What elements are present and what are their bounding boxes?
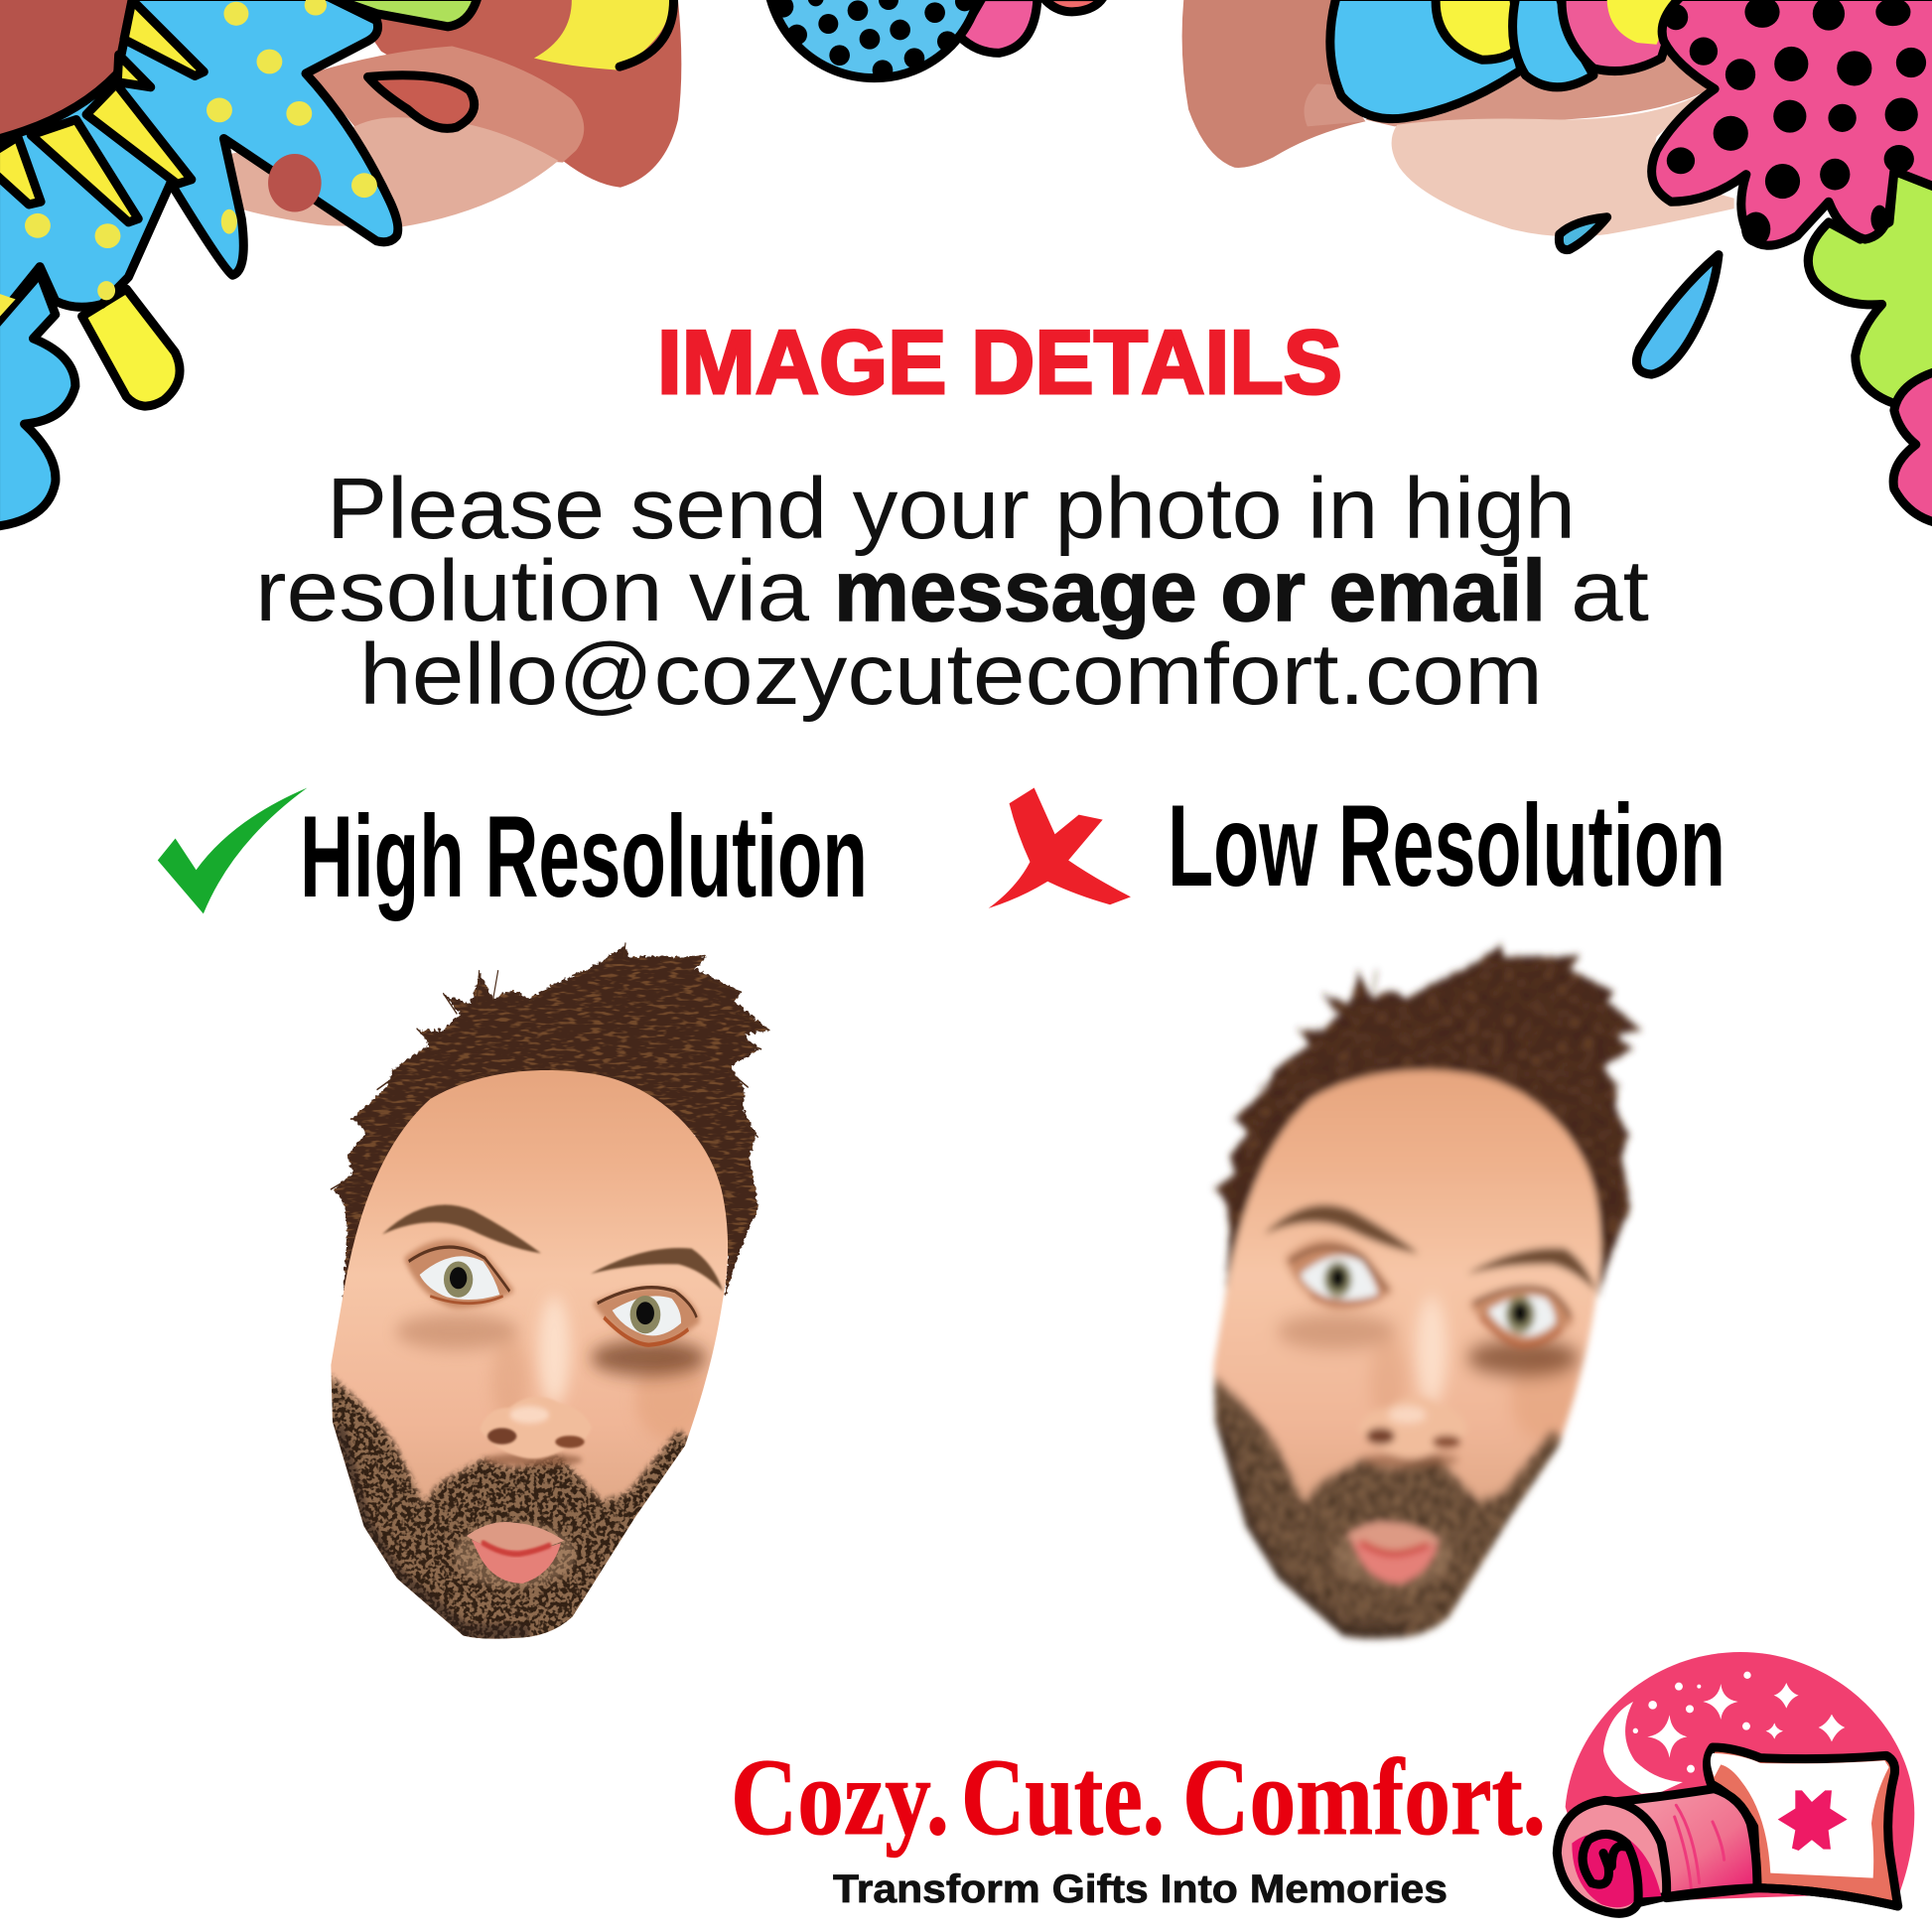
yellow corner fragment bbox=[0, 294, 16, 317]
line one: Please send your photo in high bbox=[327, 461, 1576, 557]
hair bbox=[335, 947, 769, 1299]
pillow front bbox=[1711, 1753, 1889, 1878]
patch around mouth bbox=[454, 1522, 576, 1588]
yellow spikes bbox=[0, 0, 204, 222]
beard dark edge bbox=[340, 1427, 529, 1633]
small blue drop bbox=[1559, 217, 1607, 250]
right eye bbox=[593, 1288, 700, 1346]
nostril left bbox=[487, 1428, 516, 1445]
blanket roll bbox=[1557, 1800, 1667, 1913]
title: IMAGE DETAILS bbox=[657, 313, 1342, 413]
black dots bbox=[1664, 0, 1926, 246]
pink bow bbox=[1562, 0, 1681, 71]
yellow dots bbox=[25, 0, 377, 300]
line two start: resolution via bbox=[255, 543, 810, 639]
light skin blob bbox=[230, 117, 558, 227]
icon: red cross mark bbox=[989, 788, 1131, 908]
brown blob bbox=[0, 0, 133, 138]
blanket body bbox=[1613, 1789, 1757, 1898]
blue lower drip bbox=[0, 274, 75, 526]
pillow star bbox=[1778, 1790, 1848, 1851]
decoration: top-left paint splash bbox=[0, 0, 681, 526]
right brow bbox=[591, 1248, 723, 1292]
lighter overlay bbox=[1305, 83, 1365, 126]
yellow bow accent bbox=[1607, 0, 1676, 45]
roll inner colour bbox=[1572, 1833, 1661, 1907]
label: high resolution: High Resolution bbox=[300, 791, 868, 921]
decoration: top-centre dotted ball bbox=[766, 0, 1104, 80]
blue star splash bbox=[0, 0, 398, 322]
face skin bbox=[331, 1070, 728, 1639]
mid skin band bbox=[1365, 41, 1710, 126]
line two end: at bbox=[1571, 543, 1649, 639]
body text bbox=[255, 461, 1649, 723]
word: cute: Cute. bbox=[961, 1736, 1165, 1858]
small coral lobe bbox=[1042, 0, 1104, 12]
roll swirl bbox=[1583, 1834, 1638, 1903]
pillow bbox=[1708, 1747, 1898, 1906]
dark skin blob bbox=[1182, 0, 1365, 168]
blue bow right bbox=[1513, 0, 1593, 87]
icon: green check mark bbox=[158, 788, 307, 913]
dark skin blob bbox=[345, 0, 681, 188]
blue bow left bbox=[1330, 0, 1521, 119]
blue ball bbox=[766, 0, 982, 78]
moon bbox=[1603, 1702, 1683, 1794]
under-nose shadow bbox=[483, 1453, 583, 1466]
word: comfort: Comfort. bbox=[1182, 1736, 1546, 1858]
photo: blurred face, low resolution bbox=[1210, 943, 1641, 1645]
left brow bbox=[382, 1204, 541, 1253]
stars bbox=[1633, 1672, 1845, 1773]
brand wordmark bbox=[731, 1736, 1546, 1858]
stroke on yellow shape bbox=[620, 0, 674, 67]
nostril right bbox=[555, 1436, 585, 1449]
black dots bbox=[771, 0, 974, 80]
hair wisps bbox=[331, 943, 769, 1189]
nose bridge highlight bbox=[538, 1296, 570, 1405]
line three: hello@cozycutecomfort.com bbox=[359, 626, 1543, 723]
nose tip highlight bbox=[509, 1406, 549, 1424]
pillow ground stroke bbox=[1666, 1888, 1898, 1906]
night dome bbox=[1566, 1652, 1914, 1903]
blanket stripes bbox=[1675, 1805, 1725, 1888]
large blue drop bbox=[1636, 255, 1719, 374]
green blob bbox=[1808, 171, 1932, 403]
pink lobe bbox=[960, 0, 1037, 53]
yellow drip bbox=[82, 289, 180, 406]
yellow shape top bbox=[534, 0, 669, 70]
photo: sharp face, high resolution bbox=[328, 943, 769, 1645]
green shape top bbox=[328, 0, 478, 27]
pink splash bbox=[1652, 0, 1932, 245]
teardrop outline bbox=[368, 75, 475, 128]
left eye socket shadow bbox=[395, 1313, 518, 1350]
logo: blanket and pillow bbox=[1557, 1652, 1914, 1913]
pink bottom blob bbox=[1893, 371, 1932, 523]
beard bbox=[328, 1374, 695, 1645]
right cheek tone bbox=[635, 1355, 708, 1441]
line two bold: message or email bbox=[834, 543, 1546, 639]
right eye socket shadow bbox=[591, 1339, 707, 1376]
nose side shadow bbox=[491, 1336, 528, 1422]
lips bbox=[467, 1522, 564, 1584]
light skin blob bbox=[1392, 90, 1734, 236]
brown dot bbox=[268, 154, 322, 212]
nose tip bbox=[480, 1397, 592, 1458]
yellow bow inner bbox=[1436, 0, 1521, 60]
word: cozy: Cozy. bbox=[731, 1736, 949, 1858]
brand tagline: Transform Gifts Into Memories bbox=[833, 1867, 1448, 1911]
mid skin blob bbox=[310, 46, 584, 163]
decoration: top-right paint splash bbox=[1182, 0, 1932, 523]
left eye bbox=[404, 1240, 514, 1309]
